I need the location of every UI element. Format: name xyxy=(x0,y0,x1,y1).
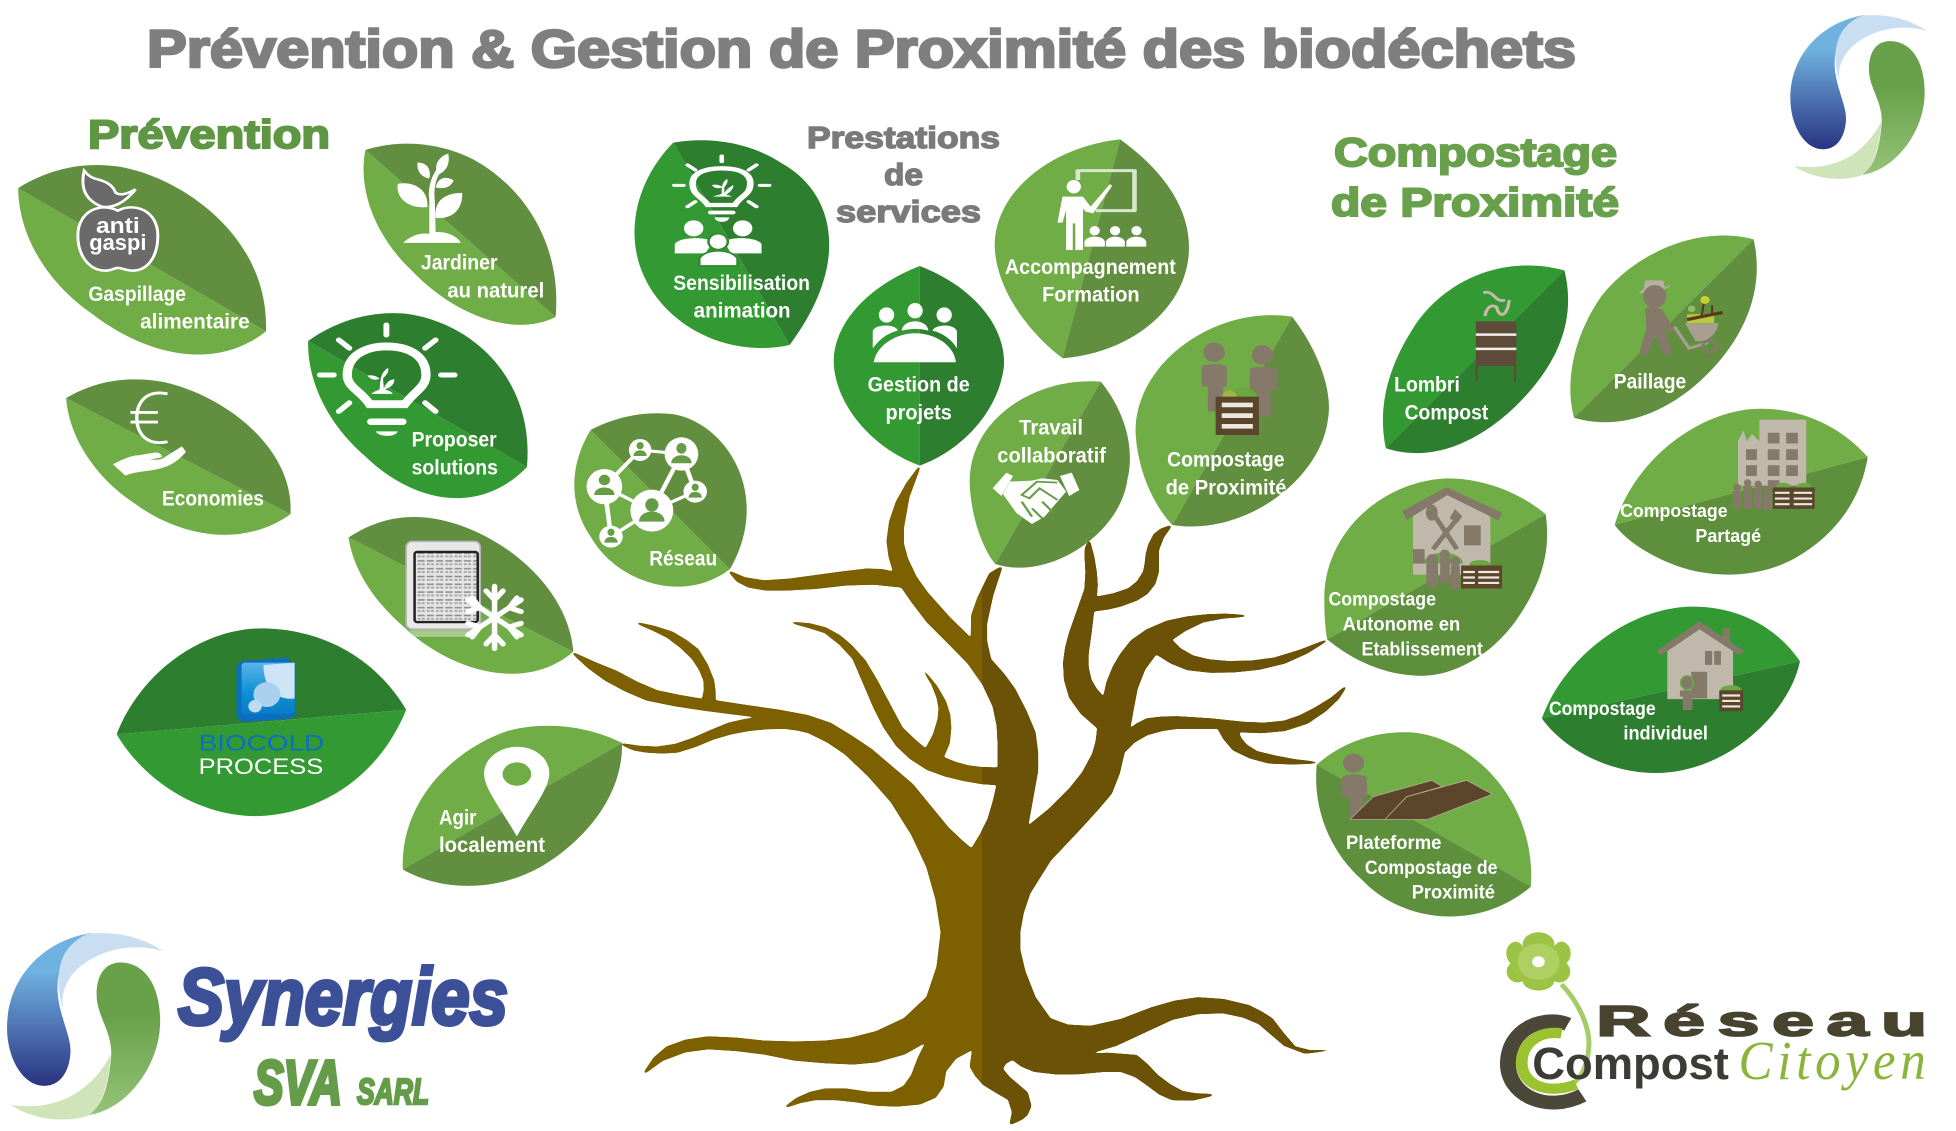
label xyxy=(88,282,250,333)
label xyxy=(868,372,970,424)
icon: establishment building with cutlery xyxy=(1403,487,1502,589)
label: Compost: Compost xyxy=(1532,1039,1729,1089)
tree xyxy=(573,467,1346,1124)
icon: light bulb with plant xyxy=(320,325,455,436)
leaf: Compostage Partagé xyxy=(1615,409,1868,575)
icon: Biocold cube xyxy=(237,658,295,722)
icon: anti gaspi apple: gaspi xyxy=(89,231,146,255)
leaf: Economies xyxy=(66,379,291,535)
label xyxy=(1166,447,1287,499)
label: Economies xyxy=(162,486,264,510)
label xyxy=(439,806,546,857)
label: Compostage xyxy=(1167,447,1284,471)
label xyxy=(1346,833,1497,903)
label xyxy=(412,427,498,479)
logo text: Synergies SVA SARL: Synergies xyxy=(178,952,508,1041)
label: Jardiner xyxy=(421,250,498,274)
label: Proposer xyxy=(412,427,497,451)
label: Paillage xyxy=(1614,369,1686,393)
label xyxy=(1620,501,1761,547)
label: Biocold Process: BIOCOLD xyxy=(199,731,324,756)
icon: handshake xyxy=(993,473,1079,524)
heading: Prestations de services: services xyxy=(836,194,981,229)
icon: trainer and audience xyxy=(1057,171,1146,250)
icon: meeting table xyxy=(873,303,957,362)
icon: snowflake xyxy=(468,586,521,649)
label xyxy=(997,415,1107,467)
icon: person and compost windrows xyxy=(1342,754,1492,819)
label: alimentaire xyxy=(140,309,250,333)
icon: two people and compost bin xyxy=(1202,343,1277,435)
icon: gardener with wheelbarrow xyxy=(1639,280,1723,354)
label: Gaspillage xyxy=(88,282,186,306)
leaf: Gestion de projets xyxy=(834,266,1004,466)
label: Compostage de xyxy=(1365,858,1497,879)
label: Proximité xyxy=(1412,883,1495,903)
title: Prévention & Gestion de Proximité des biodéchets xyxy=(147,20,1576,79)
label xyxy=(421,250,544,302)
label: collaboratif xyxy=(997,443,1107,467)
icon: euro in hand xyxy=(113,393,186,476)
label: Formation xyxy=(1042,282,1140,306)
heading: Compostage de Proximité: de Proximité xyxy=(1331,181,1619,225)
leaf: Jardiner au naturel xyxy=(364,144,556,325)
label: Partagé xyxy=(1695,526,1761,547)
icon: building, residents and compost bins xyxy=(1733,420,1815,510)
leaf: Travail collaboratif xyxy=(970,381,1130,568)
icon: network of people xyxy=(587,437,707,548)
label: Compostage xyxy=(1549,699,1656,719)
label xyxy=(1005,255,1176,306)
leaf: Paillage xyxy=(1570,236,1757,422)
leaf: cold panel and snowflake xyxy=(349,517,573,674)
label: Sensibilisation xyxy=(673,271,810,295)
leaf: Accompagnement Formation xyxy=(995,139,1189,358)
leaf: Gaspillage alimentaire xyxy=(18,165,266,355)
leaf: Agir localement xyxy=(403,726,622,886)
icon: map pin xyxy=(484,747,549,836)
label: Autonome en xyxy=(1343,615,1460,635)
leaf: Lombri Compost xyxy=(1383,265,1568,453)
logo: Réseau Compost Citoyen xyxy=(1506,932,1940,1103)
label: au naturel xyxy=(447,278,544,302)
icon: anti gaspi apple: anti xyxy=(96,214,140,238)
label: projets xyxy=(886,400,952,424)
label: Compostage xyxy=(1328,590,1436,610)
leaf: Compostage de Proximité xyxy=(1136,315,1329,526)
label: Travail xyxy=(1019,415,1083,439)
label: Biocold Process: PROCESS xyxy=(199,754,323,779)
heading: Compostage de Proximité: Compostage xyxy=(1334,131,1617,175)
label: de Proximité xyxy=(1166,475,1287,499)
logo text: Synergies SVA SARL: SARL xyxy=(357,1071,429,1112)
label: Etablissement xyxy=(1362,640,1483,660)
icon: bulb and people xyxy=(674,156,769,266)
icon: plant xyxy=(398,154,462,243)
label: Compostage xyxy=(1620,501,1728,522)
label: localement xyxy=(439,833,546,857)
logo text: Synergies SVA SARL xyxy=(178,952,508,1118)
leaf: Sensibilisation animation xyxy=(634,140,829,348)
label xyxy=(673,271,810,322)
icon: double C ring xyxy=(1508,1021,1582,1103)
label: Réseau: Réseau xyxy=(1596,996,1940,1045)
icon: worms and worm bin xyxy=(1476,292,1516,381)
label: Plateforme xyxy=(1346,833,1441,853)
leaf: Plateforme Compostage de Proximité xyxy=(1316,732,1531,916)
heading: Prestations de services: Prestations xyxy=(807,120,1000,155)
leaf: Compostage Autonome en Etablissement xyxy=(1324,478,1547,676)
label: solutions xyxy=(412,455,498,479)
heading: Prestations de services xyxy=(807,120,1000,229)
icon: cold panel xyxy=(406,541,480,637)
label: Biocold Process xyxy=(199,731,324,779)
label: Accompagnement xyxy=(1005,255,1176,279)
leaf: Biocold Process xyxy=(117,628,406,816)
label: animation xyxy=(694,298,791,322)
heading: Prestations de services: de xyxy=(884,157,923,192)
icon: anti gaspi apple xyxy=(78,171,158,271)
icon: flower and stem xyxy=(1506,932,1589,1084)
leaf: Proposer solutions xyxy=(308,313,528,498)
icon: house with person and bin xyxy=(1656,621,1744,711)
heading: Compostage de Proximité xyxy=(1331,131,1619,225)
label xyxy=(1394,372,1489,424)
label: Agir xyxy=(439,806,477,830)
label: individuel xyxy=(1623,724,1708,744)
label xyxy=(1328,590,1483,660)
leaf: Réseau xyxy=(574,413,747,587)
logo text: Synergies SVA SARL: SVA xyxy=(254,1049,342,1118)
label xyxy=(1549,699,1708,744)
label: Réseau xyxy=(649,546,717,570)
label: Compost xyxy=(1405,400,1489,424)
leaf: Compostage individuel xyxy=(1542,607,1800,773)
label: Gestion de xyxy=(868,372,970,396)
heading: Prévention: Prévention xyxy=(88,113,330,157)
logo: Synergies S small xyxy=(1790,15,1928,179)
logo: Synergies S large xyxy=(7,933,164,1120)
label: Lombri xyxy=(1394,372,1460,396)
